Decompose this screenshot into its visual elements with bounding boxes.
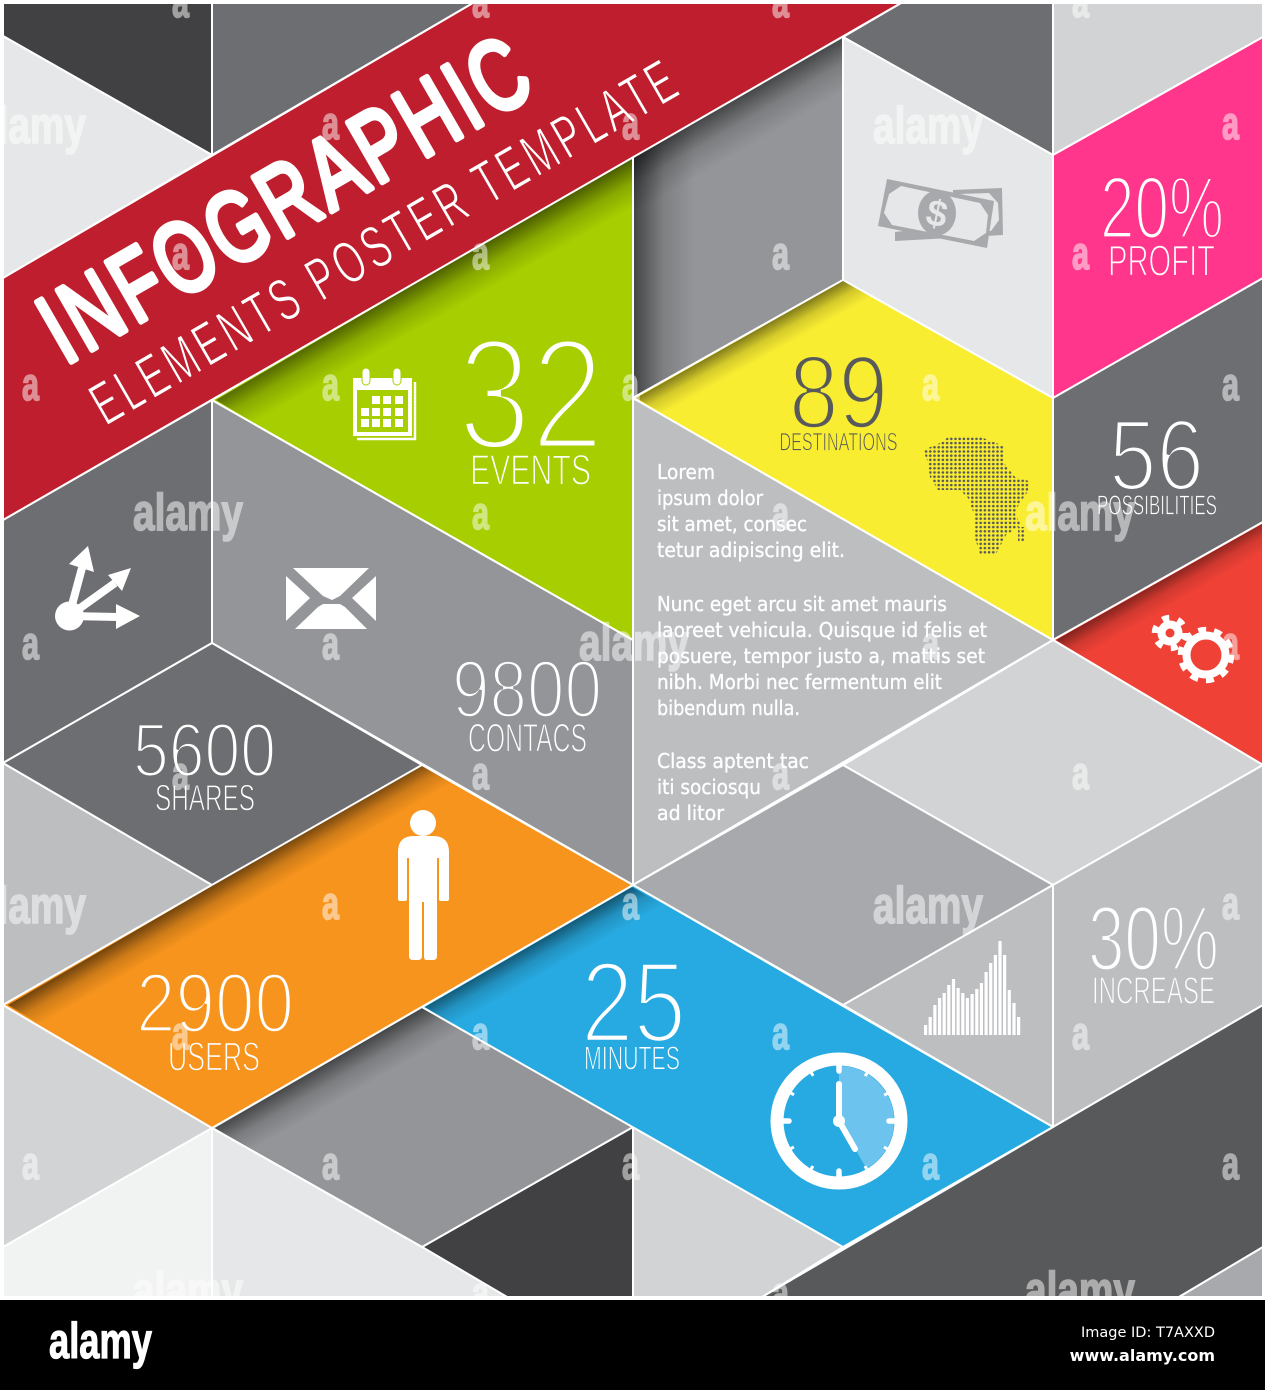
value: 32: 32 [458, 305, 604, 483]
panel: left lower gray [3, 1005, 212, 1247]
watermarks: alamy [133, 484, 243, 542]
watermarks: a [472, 1267, 489, 1319]
panel: bottom right corner [1179, 1247, 1263, 1297]
watermarks: a [622, 97, 639, 149]
footer logo: alamy: alamy [49, 1313, 152, 1369]
watermarks: a [322, 358, 339, 410]
text block: lorem ipsum: ad litor [657, 801, 725, 825]
watermarks: a [1072, 227, 1089, 279]
watermarks: a [622, 1137, 639, 1189]
watermarks: a [22, 358, 39, 410]
value: 2900: 2900 [136, 956, 294, 1050]
panel: shares [3, 643, 422, 885]
panel: body text (light gray) [633, 398, 1053, 885]
watermarks: a [772, 487, 789, 539]
panel: top-left light [3, 36, 212, 278]
value: 56: 56 [1109, 400, 1204, 512]
watermarks: a [622, 877, 639, 929]
watermarks: alamy [873, 877, 983, 935]
icon: dotted Africa map [923, 436, 1029, 554]
watermarks: a [22, 617, 39, 669]
watermarks: a [772, 747, 789, 799]
panel: top-left dark triangle [3, 3, 212, 155]
icon: envelope [286, 568, 376, 629]
watermarks: a [472, 1007, 489, 1059]
panel: light diamond [843, 640, 1263, 885]
panel: destinations (yellow) [633, 280, 1053, 640]
watermarks: a [172, 227, 189, 279]
watermarks: a [322, 617, 339, 669]
watermarks: alamy [873, 97, 983, 155]
watermarks: a [1072, 1007, 1089, 1059]
icon: calendar [353, 368, 415, 439]
watermarks: alamy [1025, 1262, 1135, 1320]
text block: lorem ipsum: Class aptent tac [657, 749, 809, 773]
text block: lorem ipsum: bibendum nulla. [657, 696, 800, 720]
icon: clock [777, 1059, 901, 1183]
panel: left mid gray [3, 763, 212, 1005]
label: PROFIT: PROFIT [1108, 237, 1215, 286]
label: SHARES: SHARES [155, 778, 255, 819]
panel: minutes (blue) [422, 885, 1053, 1247]
text block: lorem ipsum: nibh. Morbi nec fermentum elit [657, 670, 942, 694]
watermarks: a [772, 1267, 789, 1319]
panel: contacts [212, 400, 633, 885]
panel: bottom left lightest [3, 1128, 212, 1297]
panel: top right light gray [1053, 3, 1263, 155]
value: 25: 25 [581, 939, 686, 1067]
label: CONTACS: CONTACS [468, 717, 587, 761]
panel: upper centre gray with shadow [633, 37, 843, 398]
watermarks: alamy [579, 614, 689, 672]
label: USERS: USERS [168, 1034, 260, 1080]
icon: banknotes: $ [923, 191, 952, 236]
title: INFOGRAPHIC: INFOGRAPHIC [20, 13, 552, 384]
watermarks: a [472, 227, 489, 279]
footer: website: www.alamy.com [1070, 1346, 1215, 1365]
watermarks: a [472, 487, 489, 539]
subtitle: ELEMENTS POSTER TEMPLATE: ELEMENTS POSTER TEMPLATE [78, 45, 692, 438]
watermarks: a [922, 358, 939, 410]
panel: users (orange) [3, 765, 633, 1128]
watermarks: a [772, 227, 789, 279]
text block: lorem ipsum: sit amet, consec [657, 512, 807, 536]
value: 9800: 9800 [452, 644, 602, 735]
watermarks: a [172, 1007, 189, 1059]
text block: lorem ipsum: ipsum dolor [657, 486, 763, 510]
watermarks: a [922, 617, 939, 669]
panel: events (green) [212, 155, 633, 640]
text block: lorem ipsum: Nunc eget arcu sit amet mauris [657, 592, 947, 616]
panel: mid gray diamond [633, 765, 1053, 1005]
panel: chart triangle [843, 885, 1053, 1127]
watermarks: a [322, 877, 339, 929]
panel: share icon panel [3, 400, 212, 763]
watermarks: a [22, 1137, 39, 1189]
panel: profit (pink) [1053, 37, 1263, 398]
footer bar [0, 1300, 1265, 1390]
panel: money [843, 37, 1053, 398]
value: 5600: 5600 [133, 708, 276, 794]
text block: lorem ipsum: posuere, tempor justo a, mattis set [657, 644, 985, 668]
text block: lorem ipsum: iti sociosqu [657, 775, 761, 799]
watermarks: a [622, 358, 639, 410]
watermarks: a [772, 1007, 789, 1059]
panel: bottom centre light gray [633, 1127, 843, 1297]
watermarks: a [922, 1137, 939, 1189]
watermarks: a [1072, 747, 1089, 799]
watermarks: a [1222, 877, 1239, 929]
watermarks: alamy [133, 1262, 243, 1320]
label: EVENTS: EVENTS [470, 447, 591, 495]
text block: lorem ipsum [657, 460, 987, 825]
panel: settings (red) [1053, 522, 1263, 765]
watermarks: a [1222, 617, 1239, 669]
footer: image id: Image ID: T7AXXD [1081, 1325, 1215, 1341]
watermarks: a [322, 97, 339, 149]
watermarks: a [472, 747, 489, 799]
panel: increase [1053, 765, 1263, 1127]
label: DESTINATIONS: DESTINATIONS [780, 428, 898, 456]
panel: top dark gray [843, 3, 1053, 155]
icon: person [398, 810, 449, 960]
value: 89: 89 [789, 335, 888, 451]
watermarks: a [1222, 358, 1239, 410]
watermarks: a [172, 747, 189, 799]
watermarks: a [1222, 1137, 1239, 1189]
icon: gears [1155, 618, 1232, 680]
panel: gray below orange with shadow [212, 1007, 633, 1247]
icon: share arrows [55, 546, 140, 630]
text block: lorem ipsum: laoreet vehicula. Quisque id felis et [657, 618, 987, 642]
text block: lorem ipsum: tetur adipiscing elit. [657, 538, 845, 562]
panel: top gray [212, 3, 473, 155]
panel: bottom right dark band [762, 1005, 1263, 1297]
watermarks: a [322, 1137, 339, 1189]
watermarks: a [1222, 97, 1239, 149]
panel: bottom centre dark [422, 1127, 633, 1297]
watermarks: alamy [1025, 484, 1135, 542]
label: MINUTES: MINUTES [584, 1040, 680, 1078]
panel: title band (red) [3, 3, 901, 520]
panel: possibilities (dark gray) [1053, 278, 1263, 640]
icon: bar chart [924, 941, 1020, 1035]
text block: lorem ipsum: Lorem [657, 460, 715, 484]
panel: bottom light [212, 1128, 507, 1297]
icon: banknotes [878, 179, 1003, 248]
